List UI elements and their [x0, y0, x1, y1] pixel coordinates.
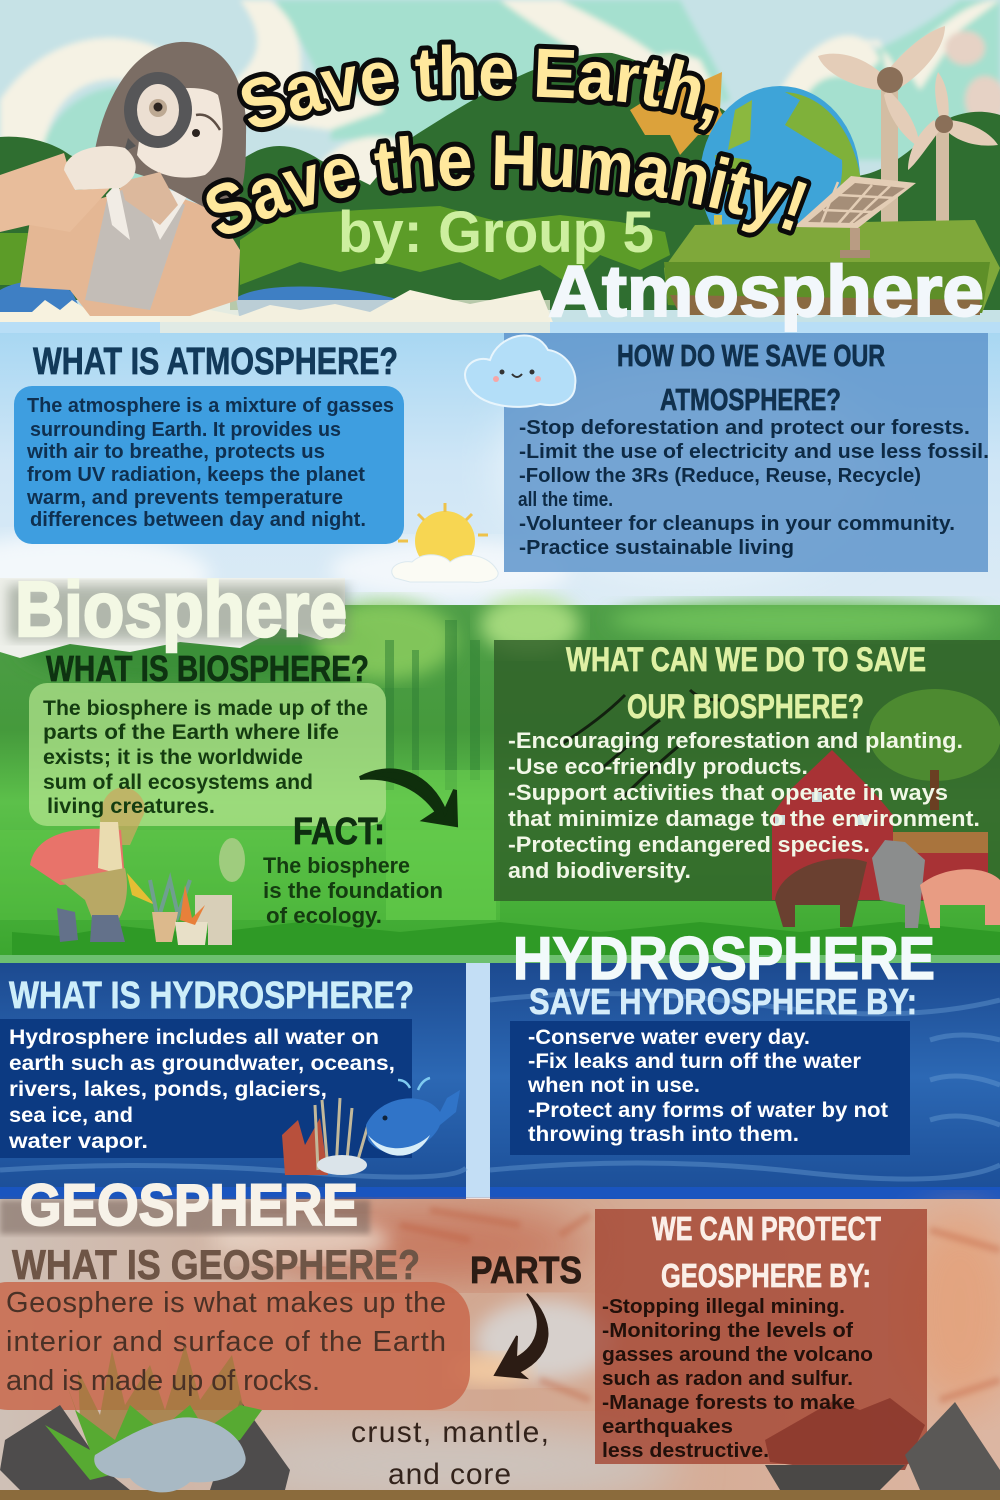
panel: what is atmosphere: with air to breathe, protects us: [26, 441, 325, 463]
panel: how to save biosphere: -Support activities that operate in ways: [508, 780, 948, 805]
teal sky patches: [275, 0, 650, 140]
panel: what is atmosphere: surrounding Earth. It provides us: [30, 419, 341, 441]
heading: WHAT IS ATMOSPHERE?: [33, 341, 398, 383]
heading: WHAT IS GEOSPHERE?: [12, 1241, 420, 1288]
panel: geosphere background: [0, 1199, 1000, 1500]
panel: protect geosphere: less destructive.: [602, 1440, 769, 1462]
icon: rocks and grass: [0, 1345, 290, 1492]
panel: how to save biosphere: [494, 640, 1000, 928]
hills: [0, 137, 120, 300]
fact block: The biosphere: [263, 853, 410, 878]
panel: how to save atmosphere: -Follow the 3Rs (Reduce, Reuse, Recycle): [519, 465, 921, 487]
fact block: is the foundation: [263, 878, 443, 903]
island platform with solar panel: [664, 176, 1000, 315]
fact block: FACT:: [293, 811, 385, 853]
magnifier: [124, 72, 192, 148]
panel: how to save atmosphere: HOW DO WE SAVE OUR: [617, 338, 885, 373]
biosphere definition text: exists; it is the worldwide: [43, 746, 303, 769]
hair: [95, 42, 246, 218]
panel: protect geosphere: gasses around the volcano: [602, 1344, 873, 1366]
panel: protect geosphere: WE CAN PROTECT: [652, 1210, 881, 1247]
panel: how to save atmosphere: ATMOSPHERE?: [660, 382, 841, 417]
panel: protect geosphere: earthquakes: [602, 1416, 733, 1438]
title: Save the Humanity!: [202, 130, 812, 239]
icon: wind turbines: [818, 26, 998, 235]
fact block: of ecology.: [266, 903, 382, 928]
fact block: [263, 811, 443, 928]
panel: atmosphere background: [0, 300, 1000, 615]
heading: WHAT IS BIOSPHERE?: [46, 648, 369, 689]
panel: what is hydrosphere: [8, 975, 414, 1153]
panel: what is hydrosphere: Hydrosphere includes all water on: [9, 1026, 379, 1049]
panel: how to save biosphere: -Encouraging reforestation and planting.: [508, 728, 963, 753]
panel: what is geosphere: Geosphere is what makes up the: [6, 1287, 446, 1319]
panel: what is atmosphere: from UV radiation, keeps the planet: [27, 464, 365, 486]
panel: how to save biosphere: -Use eco-friendly products.: [508, 754, 808, 779]
panel: how to save atmosphere: all the time.: [518, 489, 613, 511]
woman with magnifier: [0, 42, 246, 316]
panel: protect geosphere: such as radon and sulfur.: [602, 1368, 853, 1390]
panel: how to save atmosphere: -Practice sustainable living: [519, 537, 794, 559]
panel: how to save atmosphere: [504, 333, 989, 572]
heading: SAVE HYDROSPHERE BY:: [529, 981, 917, 1022]
heading: parts: PARTS: [470, 1250, 582, 1292]
panel: what is atmosphere: warm, and prevents temperature: [26, 487, 343, 509]
panel: what is hydrosphere: earth such as groundwater, oceans,: [9, 1052, 395, 1075]
heading: Geosphere: GEOSPHERE: [20, 1173, 358, 1238]
panel: what is atmosphere: differences between day and night.: [30, 509, 366, 531]
panel: protect geosphere: -Manage forests to make: [602, 1392, 855, 1414]
panel: save hydrosphere: -Fix leaks and turn off the water: [528, 1050, 861, 1073]
panel: biosphere background: [0, 578, 1000, 963]
icon: barn and animals: [772, 689, 1000, 928]
biosphere definition text: parts of the Earth where life: [43, 721, 339, 744]
arrow: parts down: [495, 1294, 547, 1378]
biosphere definition text: living creatures.: [47, 795, 215, 818]
icon: globe: [700, 86, 862, 270]
icon: sun behind title: [630, 70, 732, 155]
jacket: [20, 180, 240, 316]
face: [137, 88, 223, 178]
icon: smiling cloud: [465, 336, 575, 407]
panel: what is geosphere: interior and surface of the Earth: [6, 1326, 446, 1358]
panel: what is hydrosphere: rivers, lakes, ponds, glaciers,: [9, 1078, 327, 1101]
panel: hydrosphere background: [0, 963, 1000, 1199]
panel: what is atmosphere: [14, 341, 404, 544]
title: [202, 40, 812, 239]
panel: save hydrosphere: -Conserve water every day.: [528, 1026, 810, 1049]
cream clouds: [0, 38, 175, 190]
panel: how to save atmosphere: -Stop deforestation and protect our forests.: [519, 417, 970, 439]
heading: WHAT IS HYDROSPHERE?: [9, 975, 414, 1017]
panel: protect geosphere: -Stopping illegal mining.: [602, 1296, 845, 1318]
panel: how to save atmosphere: -Limit the use of electricity and use less fossil.: [519, 441, 989, 463]
hand: [64, 146, 136, 190]
panel: save hydrosphere: [527, 981, 917, 1146]
panel: how to save atmosphere: -Volunteer for cleanups in your community.: [519, 513, 955, 535]
shirt: [85, 180, 185, 310]
parts list: and core: [388, 1458, 511, 1491]
panel: header scene: [0, 0, 1000, 340]
panel: protect geosphere: -Monitoring the levels of: [602, 1320, 853, 1342]
icon: birds: [560, 690, 720, 800]
icon: whale and coral: [282, 1078, 460, 1175]
panel: protect geosphere: [595, 1209, 1000, 1490]
biosphere definition text: The biosphere is made up of the: [43, 697, 368, 720]
geosphere definition last line: and is made up of rocks.: [6, 1365, 320, 1397]
panel: what is atmosphere: The atmosphere is a mixture of gasses: [27, 395, 394, 417]
icon: gardener with plants: [30, 787, 245, 945]
arm: [0, 153, 110, 232]
biosphere definition text: [43, 697, 368, 818]
panel: what is geosphere: [0, 1241, 470, 1410]
subtitle: by: Group 5: [338, 200, 654, 265]
biosphere definition text: sum of all ecosystems and: [43, 771, 313, 794]
panel: how to save biosphere: OUR BIOSPHERE?: [627, 688, 864, 726]
panel: how to save biosphere: and biodiversity.: [508, 858, 691, 883]
panel: how to save biosphere: that minimize damage to the environment.: [508, 806, 980, 831]
panel: save hydrosphere: -Protect any forms of water by not: [528, 1099, 888, 1122]
arrow: to fact: [360, 770, 456, 825]
heading: Biosphere: Biosphere: [15, 565, 347, 653]
panel: what is hydrosphere: water vapor.: [8, 1130, 148, 1153]
title: Save the Earth,: [237, 40, 719, 136]
icon: sun and cloud: [392, 503, 498, 582]
water strip: [0, 281, 410, 322]
icon: red rocks and grey rocks: [765, 1398, 1000, 1490]
heading: Hydrosphere: HYDROSPHERE: [513, 925, 935, 992]
panel: save hydrosphere: throwing trash into them.: [528, 1123, 799, 1146]
parts list: [351, 1416, 549, 1491]
heading: Atmosphere: Atmosphere: [548, 252, 984, 332]
panel: what is biosphere: [29, 648, 386, 826]
panel: protect geosphere: GEOSPHERE BY:: [661, 1257, 871, 1294]
panel: how to save biosphere: -Protecting endangered species.: [508, 832, 870, 857]
panel: save hydrosphere: when not in use.: [527, 1074, 700, 1097]
parts list: crust, mantle,: [351, 1416, 549, 1449]
panel: what is hydrosphere: sea ice, and: [9, 1104, 133, 1127]
